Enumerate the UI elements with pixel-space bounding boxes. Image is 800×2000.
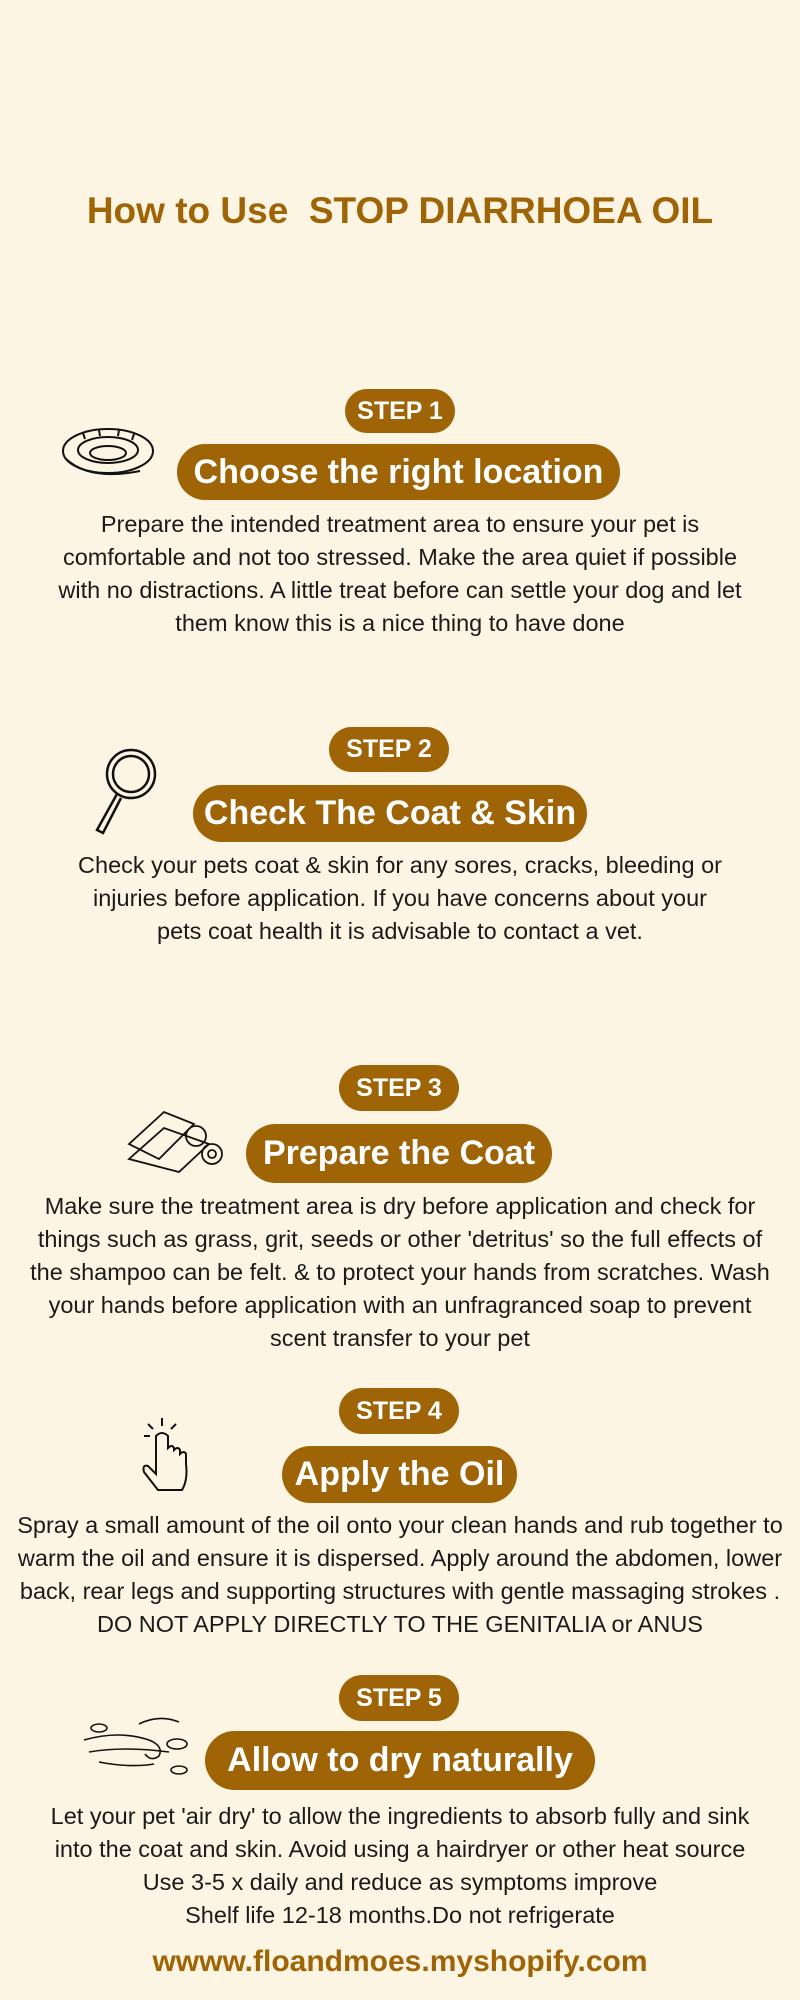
step 5 badge — [339, 1675, 459, 1721]
step 1 text: Prepare the intended treatment area to ensure your pet is — [101, 511, 699, 537]
step 3 text: Make sure the treatment area is dry before application and check for — [45, 1193, 755, 1219]
step 5 text: Shelf life 12-18 months.Do not refrigerate — [185, 1902, 615, 1928]
step 3 heading — [246, 1124, 552, 1183]
icon: tapping hand — [142, 1418, 188, 1491]
step 2 badge: STEP 2 — [346, 735, 432, 763]
step 5 text: Use 3-5 x daily and reduce as symptoms improve — [143, 1869, 657, 1895]
footer url: wwww.floandmoes.myshopify.com — [152, 1945, 648, 1978]
step 1 heading — [177, 444, 620, 500]
icon: pet bed — [62, 428, 154, 476]
step 4 badge — [339, 1388, 459, 1434]
step 3 badge: STEP 3 — [356, 1074, 442, 1102]
step 3 text — [30, 1193, 770, 1351]
icon: towels — [127, 1111, 223, 1173]
step 4 text: DO NOT APPLY DIRECTLY TO THE GENITALIA or ANUS — [97, 1611, 703, 1637]
icon: wind — [84, 1718, 188, 1775]
step 5 text — [51, 1803, 750, 1928]
step 3 text: things such as grass, grit, seeds or other 'detritus' so the full effects of — [38, 1226, 762, 1252]
step 4 heading: Apply the Oil — [295, 1455, 504, 1493]
step 4 badge: STEP 4 — [356, 1396, 442, 1424]
step 2 heading: Check The Coat & Skin — [204, 794, 576, 832]
step 3 text: scent transfer to your pet — [270, 1325, 530, 1351]
icon: magnifier — [95, 748, 156, 835]
step 3 text: the shampoo can be felt. & to protect your hands from scratches. Wash — [30, 1259, 770, 1285]
step 2 text: injuries before application. If you have concerns about your — [93, 885, 707, 911]
step 3 text: your hands before application with an unfragranced soap to prevent — [49, 1292, 751, 1318]
step 4 text: back, rear legs and supporting structures with gentle massaging strokes . — [20, 1578, 780, 1604]
step 2 text: Check your pets coat & skin for any sores, cracks, bleeding or — [78, 852, 722, 878]
step 1 heading: Choose the right location — [194, 452, 603, 490]
step 1 text — [58, 511, 742, 636]
step 1 text: comfortable and not too stressed. Make the area quiet if possible — [63, 544, 737, 570]
step 1 text: them know this is a nice thing to have done — [175, 610, 625, 636]
step 5 text: into the coat and skin. Avoid using a hairdryer or other heat source — [55, 1836, 745, 1862]
step 2 text: pets coat health it is advisable to contact a vet. — [157, 918, 643, 944]
step 1 text: with no distractions. A little treat before can settle your dog and let — [58, 577, 742, 603]
step 1 badge — [345, 389, 455, 433]
step 4 heading — [282, 1446, 517, 1503]
step 5 heading: Allow to dry naturally — [227, 1741, 573, 1779]
step 2 text — [78, 852, 722, 944]
step 4 text: warm the oil and ensure it is dispersed. Apply around the abdomen, lower — [18, 1545, 782, 1571]
step 3 badge — [339, 1065, 459, 1111]
step 2 badge — [329, 727, 449, 772]
step 4 text — [17, 1512, 783, 1637]
step 3 heading: Prepare the Coat — [263, 1134, 535, 1172]
step 5 text: Let your pet 'air dry' to allow the ingredients to absorb fully and sink — [51, 1803, 749, 1829]
step 1 badge: STEP 1 — [357, 396, 443, 424]
step 5 badge: STEP 5 — [356, 1684, 442, 1712]
title: How to Use STOP DIARRHOEA OIL — [87, 190, 713, 231]
step 5 heading — [205, 1731, 595, 1790]
step 2 heading — [193, 785, 587, 842]
step 4 text: Spray a small amount of the oil onto your clean hands and rub together to — [17, 1512, 783, 1538]
